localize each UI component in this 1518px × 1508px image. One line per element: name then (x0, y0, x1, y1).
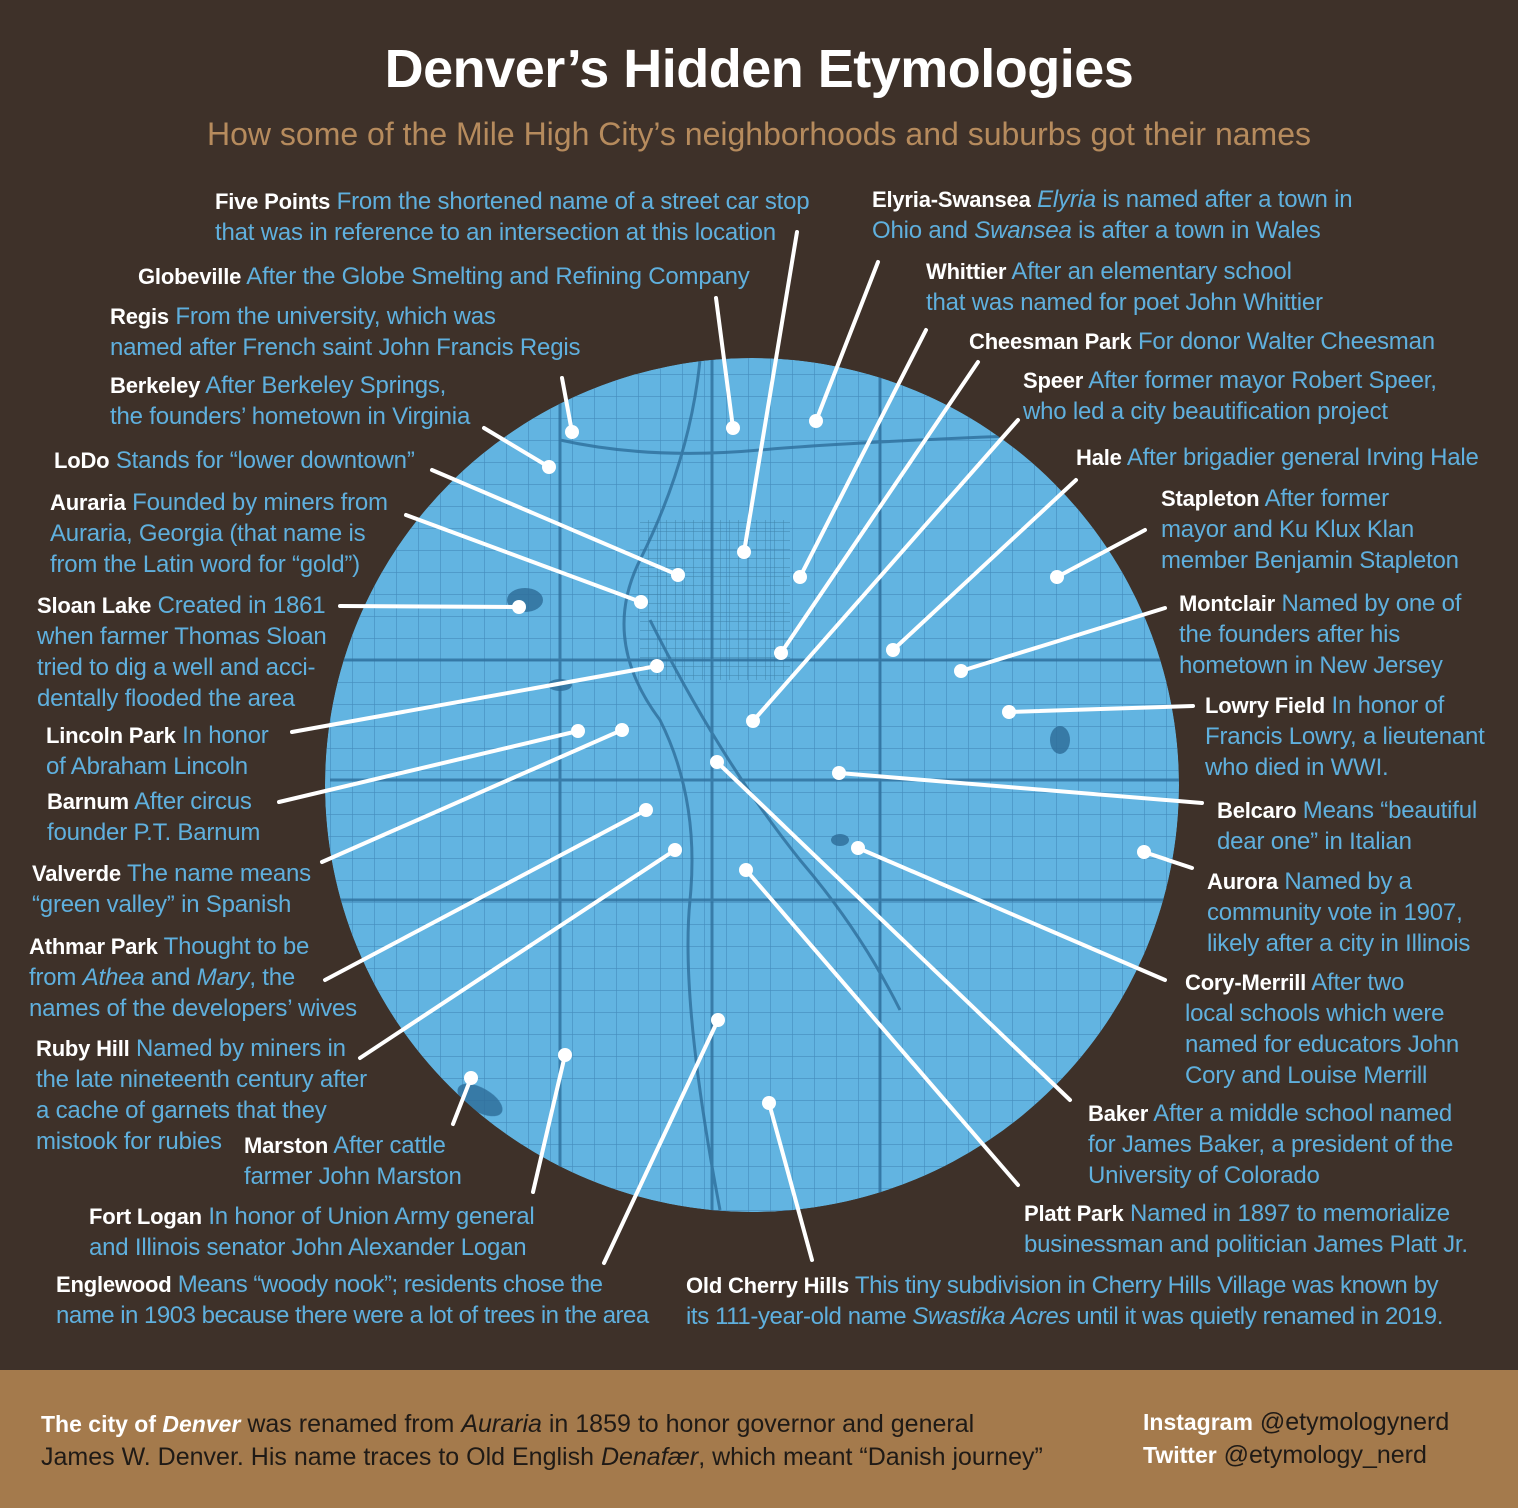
label: Aurora: Aurora Named by a (1207, 868, 1412, 895)
label: Cheesman Park: Cheesman Park For donor Walter Cheesman (969, 328, 1435, 355)
label: Fort Logan (89, 1203, 535, 1261)
label: Ruby Hill: mistook for rubies (36, 1128, 222, 1155)
label: Aurora (1207, 868, 1470, 957)
label: Berkeley (110, 256, 1186, 1224)
label: Aurora: community vote in 1907, (1207, 899, 1463, 926)
label: Old Cherry Hills (686, 1272, 1443, 1330)
label: Five Points: that was in reference to an intersection at this location (215, 219, 776, 246)
label: Baker: Baker After a middle school named (1088, 1100, 1452, 1127)
label: LoDo: LoDo Stands for “lower downtown” (54, 447, 415, 474)
label: Baker (1088, 1100, 1453, 1189)
label: Ruby Hill: the late nineteenth century after (36, 1066, 367, 1093)
label: Englewood (56, 1271, 650, 1329)
label: Globeville: Globeville After the Globe Smelting and Refining Company (138, 263, 750, 290)
label: Englewood: name in 1903 because there were a lot of trees in the area (56, 1302, 649, 1329)
label: Lincoln Park: Lincoln Park In honor (46, 722, 269, 749)
label: Montclair (604, 590, 1462, 1266)
label: Platt Park: Platt Park Named in 1897 to memorialize (1024, 1200, 1450, 1227)
label: Elyria-Swansea (872, 186, 1352, 244)
label: Cory-Merrill: Cory-Merrill After two (1185, 969, 1404, 996)
label: Barnum: Barnum After circus (47, 788, 252, 815)
label: Speer: who led a city beautification project (1023, 398, 1388, 425)
label: Stapleton: mayor and Ku Klux Klan (1161, 516, 1414, 543)
label: Fort Logan: and Illinois senator John Alexander Logan (89, 1234, 526, 1261)
label: Whittier: Whittier After an elementary school (926, 258, 1292, 285)
footer note: Denver name origin: James W. Denver. His name traces to Old English Denafær, which meant “Danish journey” (41, 1443, 1043, 1471)
label: Old Cherry Hills: its 111-year-old name Swastika Acres until it was quietly renamed in 2019. (686, 1303, 1443, 1330)
label: Belcaro (1217, 797, 1477, 855)
label: Stapleton (604, 485, 1459, 1266)
label: Five Points (215, 188, 809, 1266)
label: Montclair: the founders after his (1179, 621, 1400, 648)
label: Athmar Park: names of the developers’ wives (29, 995, 357, 1022)
label: Montclair: Montclair Named by one of (1179, 590, 1461, 617)
label: Auraria (50, 489, 388, 578)
label: Stapleton: Stapleton After former (1161, 485, 1389, 512)
label: Valverde: Valverde The name means (32, 860, 311, 887)
label: Platt Park: businessman and politician James Platt Jr. (1024, 1231, 1468, 1258)
label: Lowry Field: Francis Lowry, a lieutenant (1205, 723, 1485, 750)
label: Fort Logan: Fort Logan In honor of Union Army general (89, 1203, 535, 1230)
label: Cory-Merrill: Cory and Louise Merrill (1185, 1062, 1427, 1089)
label: Ruby Hill (36, 1035, 367, 1155)
label: Valverde: “green valley” in Spanish (32, 891, 291, 918)
label: Auraria: from the Latin word for “gold”) (50, 551, 360, 578)
label: Regis (110, 256, 1186, 1266)
label: Whittier: that was named for poet John Whittier (926, 289, 1323, 316)
label: Cory-Merrill (1185, 969, 1459, 1089)
label: Marston: farmer John Marston (244, 1163, 462, 1190)
label: Whittier (926, 258, 1323, 316)
label: Barnum: founder P.T. Barnum (47, 819, 260, 846)
label: Sloan Lake: when farmer Thomas Sloan (37, 623, 327, 650)
label: Marston: Marston After cattle (244, 1132, 446, 1159)
label: Athmar Park: from Athea and Mary, the (29, 964, 295, 991)
label: Elyria-Swansea: Elyria-Swansea Elyria is named after a town in (872, 186, 1352, 213)
label: Baker: for James Baker, a president of the (1088, 1131, 1453, 1158)
footer credits: Instagram @etymologynerd (1143, 1408, 1449, 1436)
label: Platt Park (1024, 1200, 1468, 1258)
label: Sloan Lake: Sloan Lake Created in 1861 (37, 592, 325, 619)
label: Hale: Hale After brigadier general Irving Hale (1076, 444, 1479, 471)
label: Auraria: Auraria, Georgia (that name is (50, 520, 365, 547)
label: Sloan Lake: dentally flooded the area (37, 685, 295, 712)
label: Ruby Hill: Ruby Hill Named by miners in (36, 1035, 346, 1062)
label: Berkeley: the founders’ hometown in Virginia (110, 403, 470, 430)
label: Regis: Regis From the university, which was (110, 303, 496, 330)
label: Belcaro: Belcaro Means “beautiful (1217, 797, 1477, 824)
label: Regis: named after French saint John Francis Regis (110, 334, 580, 361)
label: Athmar Park: Athmar Park Thought to be (29, 933, 309, 960)
footer note: Denver name origin: The city of Denver was renamed from Auraria in 1859 to honor governor and general (41, 1410, 974, 1438)
label: Elyria-Swansea: Ohio and Swansea is after a town in Wales (872, 217, 1321, 244)
title: Denver’s Hidden Etymologies (385, 39, 1133, 99)
label: Cory-Merrill: named for educators John (1185, 1031, 1459, 1058)
label: Sloan Lake (37, 256, 1186, 1266)
label: Athmar Park (29, 933, 357, 1022)
footer band (0, 1370, 1518, 1508)
label: Lowry Field: who died in WWI. (1205, 754, 1389, 781)
label: Ruby Hill: a cache of garnets that they (36, 1097, 327, 1124)
label: Barnum (47, 788, 260, 846)
label: Auraria: Auraria Founded by miners from (50, 489, 388, 516)
label: Five Points: Five Points From the shortened name of a street car stop (215, 188, 809, 215)
label: Cory-Merrill: local schools which were (1185, 1000, 1444, 1027)
label: Speer: Speer After former mayor Robert Speer, (1023, 367, 1437, 394)
label: Aurora: likely after a city in Illinois (1207, 930, 1470, 957)
label: Sloan Lake: tried to dig a well and acci- (37, 654, 315, 681)
subtitle: How some of the Mile High City’s neighborhoods and suburbs got their names (207, 116, 1311, 152)
label: Lincoln Park: of Abraham Lincoln (46, 753, 248, 780)
label: Montclair: hometown in New Jersey (1179, 652, 1443, 679)
footer note: Denver name origin (41, 1410, 1043, 1471)
label: Stapleton: member Benjamin Stapleton (1161, 547, 1459, 574)
map circle with leader lines (277, 230, 1204, 1266)
label: Baker: University of Colorado (1088, 1162, 1320, 1189)
footer credits (1143, 1408, 1449, 1469)
footer credits: Twitter @etymology_nerd (1143, 1441, 1427, 1469)
label: Lowry Field: Lowry Field In honor of (1205, 692, 1444, 719)
label: Speer (604, 367, 1437, 1266)
label: Valverde (32, 860, 311, 918)
label: Belcaro: dear one” in Italian (1217, 828, 1412, 855)
label: Marston (244, 1132, 462, 1190)
label: Old Cherry Hills: Old Cherry Hills This tiny subdivision in Cherry Hills Village was known by (686, 1272, 1438, 1299)
label: Berkeley: Berkeley After Berkeley Springs, (110, 372, 446, 399)
label: Lincoln Park (46, 722, 269, 780)
label: Lowry Field (604, 692, 1485, 1266)
label: Englewood: Englewood Means “woody nook”; residents chose the (56, 1271, 602, 1298)
